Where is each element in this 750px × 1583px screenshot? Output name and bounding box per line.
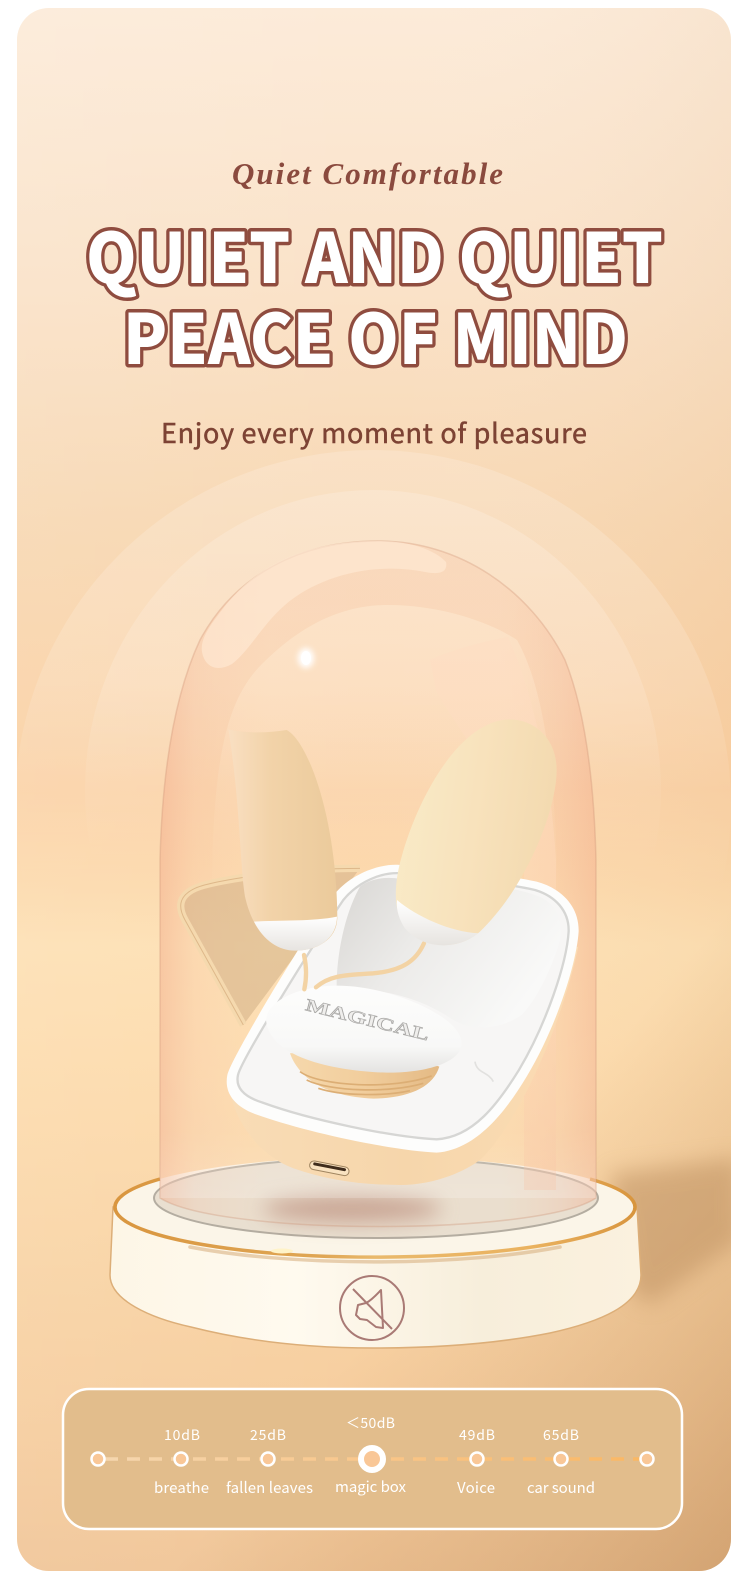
subtitle: Quiet Comfortable: Quiet Comfortable [232,156,503,191]
glass plate [154,1158,598,1238]
product shadow on plate [262,1196,442,1222]
base top plate [115,1157,635,1257]
MAGICAL lettering: MAGICAL [304,995,431,1044]
USB port [309,1160,350,1176]
sound source labels: car sound [527,1477,595,1498]
tray inner well [237,873,569,1139]
gold ring [115,1179,635,1257]
highlighted magic box dot [361,1448,383,1470]
base side [110,1207,641,1348]
sound wave arc inner [96,490,654,727]
left capsule [228,729,337,951]
dome top highlight crescent [202,541,446,668]
dashed scale line [105,1457,640,1461]
floor shadow [610,1158,740,1305]
decibel panel [63,1389,682,1529]
right capsule [396,719,557,945]
sound source labels: breathe [154,1477,209,1498]
product [181,719,579,1185]
decibel values: ＜50dB [346,1413,395,1433]
tagline: Enjoy every moment of pleasure [161,412,587,451]
gold ring glint [271,1248,293,1254]
white tray [227,865,579,1153]
decibel values: 65dB [543,1425,579,1445]
sound source labels: magic box [335,1476,407,1497]
decibel values: 10dB [164,1425,200,1445]
pedestal base [110,1157,641,1348]
tray upper recess [337,878,561,1028]
dome body [160,541,596,1226]
title [86,203,663,384]
sound source labels: fallen leaves [226,1477,313,1498]
title line 2: PEACE OF MIND [123,284,628,384]
tray groove squiggle [475,1062,493,1082]
rear lid [181,868,360,1025]
right refracted panel [430,637,556,1190]
dome shoulder tint band [160,541,596,900]
specular dot [298,648,314,668]
case body [228,947,578,1185]
cables [304,943,424,989]
glass dome [160,541,596,1226]
sound source labels: Voice [457,1477,495,1498]
button cap [266,986,462,1073]
sound source labels [154,1476,595,1498]
inner dome glow [212,605,558,900]
panel box [63,1389,682,1529]
scale dots [92,1452,654,1466]
mute icon [340,1276,404,1340]
threaded neck [290,1050,439,1099]
sound wave arc outer [23,450,727,756]
ring under-shadow [190,1247,560,1262]
decibel values: 49dB [459,1425,495,1445]
decibel values: 25dB [250,1425,286,1445]
title line 1: QUIET AND QUIET [86,203,663,303]
dome lower frost [160,1140,596,1198]
decibel values [164,1413,579,1445]
